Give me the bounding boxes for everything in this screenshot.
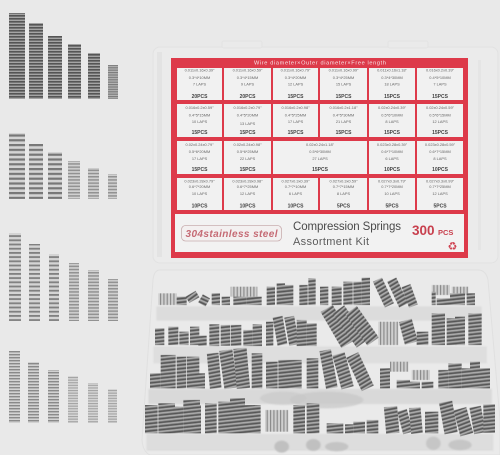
row 1 cells: 9 LAPS	[241, 82, 254, 86]
springs chart: row 2	[9, 133, 117, 199]
row 3 cells: 10PCS	[384, 167, 401, 173]
row 3 springs	[150, 348, 490, 391]
row 2 cells: 15PCS	[240, 130, 256, 136]
row 4 cells: 0.027x0.3x0.39"	[282, 178, 310, 184]
row 3 cells: 0.5*6*25MM	[237, 149, 258, 154]
row 1 cells: 0.3*4*20MM	[285, 75, 306, 80]
row 3 cells: 15PCS	[312, 167, 329, 173]
row 4 cells: 5PCS	[385, 204, 399, 210]
row 3 cells: 0.02x0.24x1.18"	[306, 142, 335, 147]
spec table	[177, 68, 463, 210]
row 2 cells: 10 LAPS	[192, 119, 208, 124]
row 2 cells: 0.02x0.24x0.59"	[426, 105, 455, 110]
piece count	[412, 223, 453, 238]
open tray	[142, 270, 500, 455]
row 2 cells	[177, 104, 463, 137]
row 3 cells: 27 LAPS	[312, 156, 328, 161]
row 4 cells: 12 LAPS	[240, 191, 256, 196]
row 1 cells: 0.3*4*15MM	[237, 75, 258, 80]
row 3 cells: 8 LAPS	[433, 156, 447, 161]
row 2 cells: 8 LAPS	[385, 119, 399, 124]
row 4 cells: 10 LAPS	[192, 191, 208, 196]
row 3 cells: 0.023x0.28x0.39"	[377, 142, 408, 147]
row 2 cells: 13 LAPS	[240, 121, 256, 126]
row 2 cells: 0.4*5*20MM	[237, 112, 258, 118]
row 3 cells	[177, 141, 463, 174]
row 4 cells	[177, 178, 463, 210]
row 1 cells: 0.011x0.16x0.79"	[281, 68, 311, 72]
icon: recycle: ♻	[448, 240, 457, 253]
product title	[293, 221, 401, 248]
row 1 cells: 7 LAPS	[193, 82, 206, 86]
product title: Assortment Kit	[293, 236, 369, 248]
piece count: PCS	[438, 228, 453, 237]
row 4 cells: 0.027x0.3x0.59"	[330, 178, 358, 184]
row 3 cells: 0.02x0.24x0.98"	[234, 142, 262, 147]
row 3 cells: 0.02x0.24x0.79"	[186, 142, 214, 147]
row 1 cells: 15PCS	[288, 94, 304, 100]
row 1 cells: 0.3*4*10MM	[189, 75, 210, 80]
row 2 cells: 0.016x0.2x0.98"	[282, 105, 310, 110]
row 4 cells: 0.023x0.28x0.98"	[232, 178, 263, 184]
row 1 springs	[158, 278, 475, 308]
row 4 cells: 0.6*7*25MM	[237, 184, 258, 189]
row 1 cells: 18 LAPS	[384, 82, 400, 86]
row 4 springs	[145, 398, 495, 436]
row 1 cells: 12 LAPS	[288, 82, 304, 86]
row 2 cells: 0.4*5*15MM	[189, 112, 210, 118]
row 1 cells: 7 LAPS	[433, 82, 447, 86]
row 4 cells: 0.7*7*20MM	[381, 184, 403, 189]
row 4 cells: 6 LAPS	[289, 191, 302, 196]
row 2 cells: 15PCS	[288, 130, 304, 136]
row 4 cells: 5PCS	[433, 204, 447, 210]
row 4 cells: 10PCS	[192, 204, 208, 210]
row 3 cells: 15PCS	[240, 167, 256, 173]
material badge	[182, 226, 282, 241]
row 1 cells: 15PCS	[432, 94, 449, 100]
row 3 cells: 6 LAPS	[385, 156, 399, 161]
row 1 cells: 15PCS	[384, 94, 401, 100]
row 3 cells: 17 LAPS	[192, 156, 208, 161]
row 2 cells: 17 LAPS	[288, 119, 304, 124]
row 4 cells: 5PCS	[337, 204, 351, 210]
row 1 cells: 0.011x0.16x0.99"	[329, 68, 359, 72]
row 4 cells: 10 LAPS	[384, 191, 400, 196]
row 4 cells: 0.7*7*25MM	[429, 184, 451, 189]
row 3 cells: 10PCS	[432, 167, 449, 173]
row 2 cells: 0.4*5*25MM	[285, 112, 306, 118]
product title: Compression Springs	[293, 221, 401, 233]
row 1 cells: 0.3*4*30MM	[381, 75, 403, 80]
row 1 cells: 15PCS	[336, 94, 352, 100]
row 2 cells: 21 LAPS	[336, 119, 352, 124]
row 1 cells: 0.4*5*10MM	[429, 75, 451, 80]
row 4 cells: 10PCS	[240, 204, 256, 210]
row 1 cells: 0.3*4*25MM	[333, 75, 354, 80]
row 3 cells: 0.6*7*10MM	[381, 149, 403, 154]
row 1 cells: 20PCS	[192, 94, 208, 100]
material badge: 304stainless steel	[186, 229, 278, 240]
row 1 cells: 20PCS	[240, 94, 256, 100]
row 1 cells: 0.016x0.2x0.39"	[426, 68, 455, 72]
row 3 cells: 0.5*6*30MM	[309, 149, 331, 154]
row 2 cells: 12 LAPS	[432, 119, 448, 124]
row 2 cells: 15PCS	[192, 130, 208, 136]
row 2 springs	[155, 305, 482, 348]
row 4 cells: 0.027x0.3x0.99"	[426, 178, 455, 184]
row 3 cells: 0.023x0.28x0.59"	[425, 142, 456, 147]
row 4 cells: 0.027x0.3x0.79"	[378, 178, 407, 184]
row 3 cells: 22 LAPS	[240, 156, 256, 161]
red label card	[171, 58, 468, 258]
row 3 cells: 0.6*7*15MM	[429, 149, 451, 154]
row 1 cells: 15 LAPS	[336, 82, 352, 86]
product banner	[175, 214, 464, 253]
row 4 cells: 0.023x0.28x0.79"	[184, 178, 215, 184]
tray compartments with springs	[145, 278, 495, 453]
shelf reflections	[147, 306, 493, 453]
row 2 cells: 0.02x0.24x0.39"	[378, 105, 407, 110]
row 4 cells: 12 LAPS	[432, 191, 448, 196]
row 4 cells: 0.7*7*15MM	[333, 184, 354, 189]
row 2 cells: 15PCS	[336, 130, 352, 136]
row 1 cells: 0.011x0.16x0.39"	[185, 68, 215, 72]
row 2 cells: 0.5*6*15MM	[429, 112, 451, 118]
row 4 cells: 8 LAPS	[337, 191, 350, 196]
row 1 cells	[177, 68, 463, 100]
row 1 cells: 0.011x0.16x1.18"	[377, 68, 408, 72]
springs chart: row 1	[9, 13, 118, 99]
piece count: 300	[412, 223, 435, 238]
row 2 cells: 0.4*5*30MM	[333, 112, 354, 118]
row 4 cells: 0.6*7*20MM	[189, 184, 210, 189]
row 2 cells: 15PCS	[432, 130, 449, 136]
springs chart: row 3	[9, 233, 118, 321]
row 2 cells: 0.016x0.2x1.18"	[330, 105, 358, 110]
box lid	[153, 41, 498, 263]
row 3 cells: 0.5*6*20MM	[189, 149, 210, 154]
label heading: Wire diameter×Outer diameter×Free length	[254, 60, 386, 66]
row 4 cells: 10PCS	[288, 204, 304, 210]
row 3 cells: 15PCS	[192, 167, 208, 173]
row 1 cells: 0.011x0.16x0.59"	[233, 68, 263, 72]
row 2 cells: 15PCS	[384, 130, 401, 136]
row 2 cells: 0.5*6*10MM	[381, 112, 403, 118]
row 2 cells: 0.016x0.2x0.59"	[186, 105, 214, 110]
row 4 cells: 0.7*7*10MM	[285, 184, 306, 189]
springs chart: row 4	[9, 351, 117, 423]
row 2 cells: 0.016x0.2x0.79"	[234, 105, 262, 110]
